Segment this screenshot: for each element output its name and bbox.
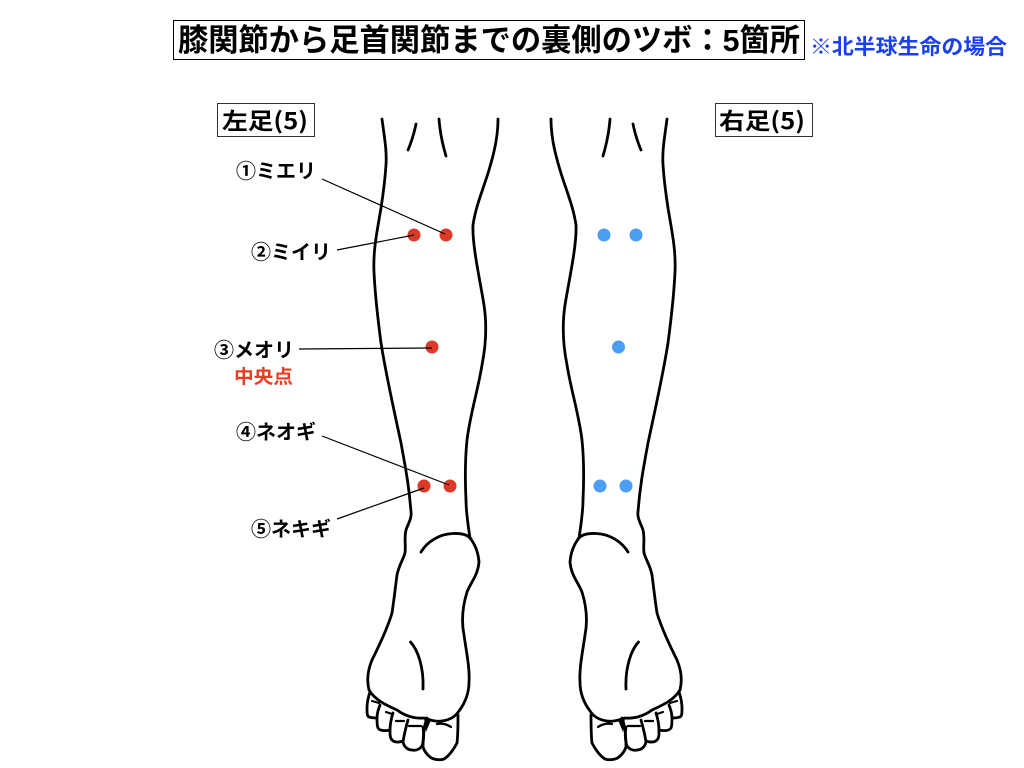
sole crease (410, 642, 423, 689)
leg outline: inner side (465, 119, 498, 500)
label 5: ⑤ネキギ (251, 518, 331, 541)
label 2 (251, 235, 414, 264)
right leg illustration (551, 119, 682, 760)
left foot heading: 左足(5) (222, 102, 308, 136)
label 3: ③メオリ (214, 339, 294, 362)
label 1 (236, 160, 445, 234)
acupoint markers right (594, 228, 642, 492)
acupoint markers left (408, 228, 456, 492)
label 5 (251, 488, 424, 541)
knee creases (408, 124, 416, 150)
note: northern hemisphere: ※北半球生命の場合 (810, 36, 1007, 59)
left leg illustration (367, 119, 498, 760)
label 4: ④ネオギ (236, 421, 316, 444)
toes (367, 692, 424, 750)
label 2: ②ミイリ (251, 241, 331, 264)
leg outline: outer side (368, 119, 479, 721)
center point note: 中央点 (234, 366, 293, 388)
right foot heading: 右足(5) (719, 102, 805, 136)
big toe (423, 715, 458, 760)
heel arc (421, 533, 471, 552)
label 1: ①ミエリ (236, 160, 316, 183)
label 4 (236, 421, 449, 485)
toe gap and nail marks (424, 718, 431, 732)
title: 膝関節から足首関節までの裏側のツボ：5箇所 (178, 23, 800, 58)
